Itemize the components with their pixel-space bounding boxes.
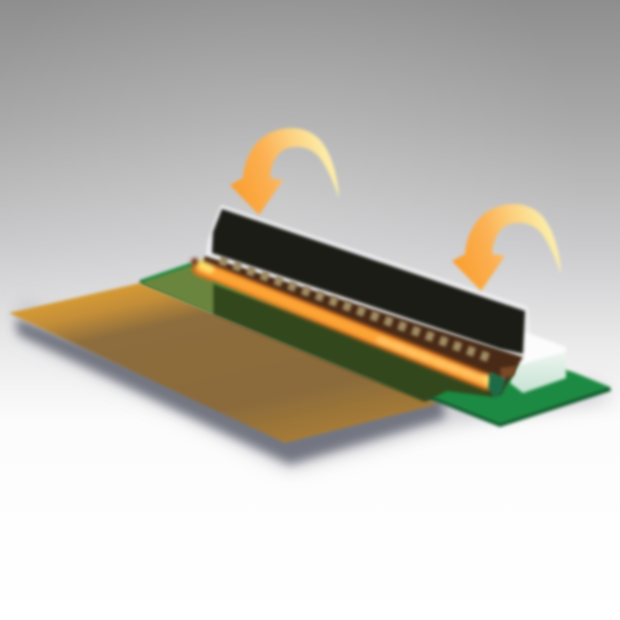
- soft shadow halo: [20, 300, 610, 470]
- arrow: left: [230, 128, 339, 215]
- green and teal end of contact strip: [488, 366, 516, 398]
- black actuator bar: [212, 209, 525, 354]
- white back plate behind actuator: [205, 205, 531, 370]
- green circuit board: [140, 263, 611, 427]
- flexible film: [9, 283, 438, 443]
- orange contact strip: [191, 258, 490, 384]
- arrow: right: [452, 204, 561, 291]
- contact shadow band: [200, 256, 523, 395]
- film over board: olive area: [140, 266, 494, 402]
- drop shadow under film: [16, 318, 445, 464]
- connector pins: [220, 260, 495, 360]
- white connector housing: [510, 332, 566, 393]
